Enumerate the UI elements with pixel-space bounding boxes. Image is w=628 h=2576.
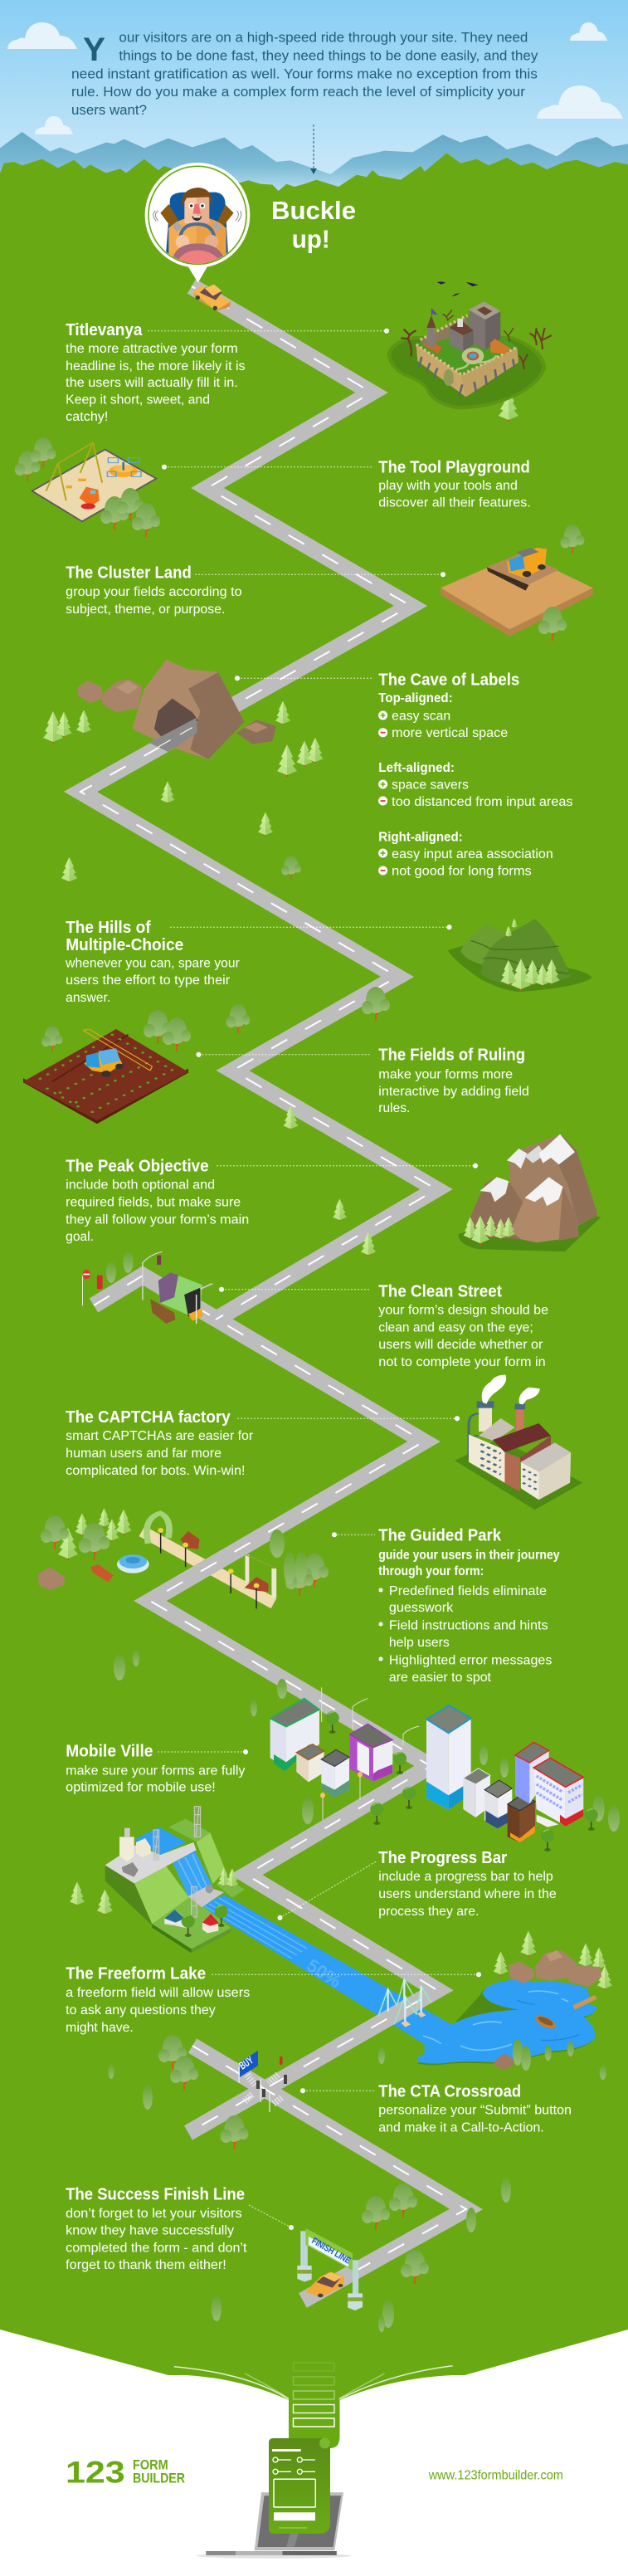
illustration: wheat field with combine — [441, 548, 593, 637]
text block: The Clean Street — [378, 1282, 548, 1369]
dashed arrow from intro to driver — [310, 124, 317, 174]
text block: The Tool Playground: The Tool Playground — [378, 457, 530, 476]
lamp posts — [320, 1772, 363, 1820]
illustration: clean street garbage truck — [82, 1251, 212, 1324]
text block: The Hills of Multiple-Choice: answer. — [66, 991, 110, 1005]
text block: The Cave of Labels: easy scan — [392, 709, 450, 723]
intro paragraph: need instant gratification as well. Your forms make no exception from this — [71, 66, 538, 81]
text block: The Peak Objective: required fields, but make sure — [66, 1195, 241, 1209]
logo: 123 Form Builder: 123 — [66, 2456, 125, 2490]
text block: Titlevanya: Titlevanya — [66, 320, 143, 339]
text block: The Cluster Land: subject, theme, or purpose. — [66, 603, 225, 617]
logo: 123 Form Builder: FORM — [133, 2456, 168, 2472]
text block: The Tool Playground: play with your tools and — [378, 479, 518, 493]
text block: The Guided Park: Predefined fields eliminate — [389, 1584, 547, 1598]
text block: The Hills of Multiple-Choice: Multiple-Choice — [66, 935, 183, 954]
text block: The Peak Objective: The Peak Objective — [66, 1157, 209, 1176]
river from dam to lake — [201, 1895, 452, 2044]
sky background — [0, 0, 628, 191]
text block: The Clean Street: The Clean Street — [378, 1282, 502, 1301]
text block: Titlevanya: catchy! — [66, 410, 108, 424]
text block: The Cave of Labels: easy input area association — [392, 847, 553, 861]
shore rock — [494, 2053, 514, 2070]
text block: The Cave of Labels: space savers — [392, 778, 469, 793]
illustration: the peak objective mountains — [459, 1134, 601, 1251]
intro paragraph: Y — [83, 32, 105, 68]
text block: The Success Finish Line — [66, 2185, 247, 2272]
illustration: hills of multiple choice — [448, 919, 592, 992]
text block: Mobile Ville: optimized for mobile use! — [66, 1781, 216, 1795]
text block: Mobile Ville: make sure your forms are fully — [66, 1764, 246, 1778]
text block: The CTA Crossroad: The CTA Crossroad — [378, 2082, 521, 2101]
text block: The CAPTCHA factory — [66, 1408, 253, 1478]
illustration: cave of labels — [77, 660, 276, 759]
text block: Titlevanya: the users will actually fill it in. — [66, 376, 238, 390]
text block: The Tool Playground — [378, 457, 531, 510]
text block: The Clean Street: users will decide whether or — [378, 1338, 543, 1352]
text block: The Fields of Ruling: rules. — [378, 1101, 410, 1115]
text block: The Cave of Labels: Top-aligned: — [378, 691, 453, 705]
logo: 123 Form Builder — [66, 2456, 185, 2490]
text block: The Freeform Lake — [66, 1964, 251, 2035]
crossroad zebra crossings — [245, 2075, 282, 2104]
text block: The Guided Park: guide your users in their journey — [378, 1548, 560, 1562]
text block: The Cave of Labels: Left-aligned: — [378, 761, 455, 775]
form sheet — [269, 2438, 330, 2534]
text block: The Guided Park: guesswork — [389, 1601, 453, 1615]
text block: The Hills of Multiple-Choice: users the effort to type their — [66, 973, 230, 988]
text block: The Freeform Lake: The Freeform Lake — [66, 1964, 206, 1983]
finish line banner text: FINISH LINE — [310, 2236, 353, 2266]
text block: The Freeform Lake: might have. — [66, 2021, 134, 2035]
text block: The Fields of Ruling: make your forms more — [378, 1067, 513, 1081]
text block: The Guided Park: through your form: — [378, 1564, 484, 1578]
clouds — [7, 22, 623, 134]
text block: The Guided Park: The Guided Park — [378, 1526, 502, 1545]
text block: The Progress Bar: process they are. — [378, 1905, 480, 1919]
illustration: finish line gate and car — [297, 2228, 363, 2310]
text block: The Peak Objective — [66, 1157, 249, 1244]
text block: The Guided Park: are easier to spot — [389, 1671, 492, 1685]
rocks above lake — [509, 1950, 601, 1987]
peak pines — [464, 1215, 515, 1245]
text block: The Hills of Multiple-Choice — [65, 918, 240, 1005]
heading: Buckle up: Buckle — [271, 196, 356, 225]
text block: The Progress Bar: The Progress Bar — [378, 1848, 507, 1867]
tall blue tower — [426, 1705, 471, 1810]
icon: taxi car — [193, 285, 231, 310]
text block: The Cave of Labels — [378, 671, 573, 878]
hills pines — [500, 919, 560, 991]
text block: The Peak Objective: include both optional and — [66, 1178, 215, 1192]
text block: The Freeform Lake: to ask any questions they — [66, 2003, 216, 2017]
purple building — [350, 1724, 392, 1782]
text block: The CTA Crossroad: and make it a Call-to-Action. — [378, 2121, 544, 2135]
river from dam to lake: 50% — [303, 1954, 345, 1992]
intro paragraph: things to be done fast, they need things to be done easily, and they — [119, 48, 538, 64]
website url: www.123formbuilder.com — [428, 2469, 563, 2483]
pine trees — [43, 389, 612, 1990]
text block: The Fields of Ruling — [378, 1046, 529, 1115]
park trees — [41, 1508, 329, 1596]
text block: The Cluster Land: group your fields according to — [66, 585, 242, 599]
illustration: freeform lake bridge, rocks and boat — [378, 1950, 601, 2070]
park path — [142, 1531, 274, 1603]
text block: The Guided Park: help users — [389, 1636, 450, 1650]
text block: The Hills of Multiple-Choice: The Hills of — [66, 918, 151, 937]
heading: Buckle up: up! — [292, 224, 330, 253]
street trees — [326, 1711, 598, 1852]
funnel sweep lines — [174, 2366, 453, 2399]
text block: The Cave of Labels: too distanced from input areas — [392, 795, 573, 809]
text block: The Clean Street: clean and easy on the eye; — [378, 1320, 533, 1334]
text block: The Tool Playground: discover all their features. — [378, 496, 531, 510]
text block: The CAPTCHA factory: The CAPTCHA factory — [66, 1408, 231, 1427]
row of townhouses — [463, 1769, 535, 1842]
intro paragraph: users want? — [71, 102, 147, 118]
text block: Mobile Ville — [66, 1742, 246, 1795]
illustration: Titlevanya castle — [387, 281, 552, 409]
text block: The Fields of Ruling: The Fields of Ruling — [378, 1046, 525, 1065]
text block: The Cave of Labels: not good for long forms — [392, 864, 532, 878]
text block: The Cluster Land: The Cluster Land — [66, 564, 192, 583]
text block: The Hills of Multiple-Choice: whenever you can, spare your — [65, 956, 240, 970]
text block: The Progress Bar: users understand where in the — [378, 1887, 557, 1901]
illustration: progress bar dam and hills — [105, 1807, 245, 1953]
buy sign and traffic lights at CTA crossroad: BUY — [236, 2054, 256, 2072]
text block: The Fields of Ruling: interactive by adding field — [378, 1085, 529, 1099]
red office building — [515, 1742, 583, 1827]
leader lines — [148, 329, 481, 2230]
text block: The Freeform Lake: a freeform field will allow users — [66, 1986, 251, 2000]
text block: The Clean Street: your form’s design should be — [378, 1303, 548, 1317]
text block: The Cave of Labels: more vertical space — [392, 726, 508, 740]
illustration: playground — [32, 442, 156, 521]
text block: The Success Finish Line: completed the form - and don’t — [66, 2241, 247, 2255]
heading: Buckle up — [271, 196, 356, 253]
illustration: mobile ville city — [270, 1687, 583, 1842]
illustration: fields of ruling with tractor — [23, 1029, 188, 1124]
winding road — [80, 286, 466, 2300]
text block: The Progress Bar — [378, 1848, 557, 1919]
text block: The CTA Crossroad — [378, 2082, 572, 2135]
text block: The Success Finish Line: know they have successfully — [66, 2223, 234, 2237]
logo: 123 Form Builder: BUILDER — [133, 2471, 185, 2486]
green tower — [270, 1699, 319, 1771]
text block: The CAPTCHA factory: human users and far more — [66, 1447, 222, 1461]
rock cypress near lake — [513, 2039, 531, 2071]
cable stayed bridge — [378, 1979, 431, 2027]
text block: The Cave of Labels: Right-aligned: — [378, 830, 463, 844]
brown corner shop — [296, 1744, 324, 1782]
lake — [398, 1980, 597, 2065]
intro paragraph: rule. How do you make a complex form reach the level of simplicity your — [71, 84, 525, 100]
text block: The Peak Objective: goal. — [66, 1230, 94, 1244]
text block: The Guided Park: Highlighted error messages — [389, 1653, 553, 1667]
intro paragraph — [71, 30, 538, 118]
teal storefront building — [321, 1749, 349, 1798]
text block: The Cluster Land — [66, 564, 242, 617]
text block: The Progress Bar: include a progress bar to help — [378, 1870, 553, 1884]
text block: The Success Finish Line: The Success Finish Line — [66, 2185, 245, 2204]
text block: Titlevanya: headline is, the more likely it is — [66, 359, 246, 373]
text block: The Success Finish Line: forget to thank them either! — [66, 2258, 226, 2272]
cypress trees — [106, 1251, 620, 2332]
text block: The CAPTCHA factory: smart CAPTCHAs are easier for — [66, 1429, 253, 1443]
text block: The Clean Street: not to complete your form in — [378, 1355, 546, 1369]
illustration: guided park — [38, 1513, 276, 1608]
text block: The Success Finish Line: don’t forget to let your visitors — [66, 2207, 242, 2221]
dam trees — [182, 1867, 238, 1937]
text block: The Cave of Labels: The Cave of Labels — [378, 671, 519, 690]
text block: The Peak Objective: they all follow your form’s main — [66, 1212, 249, 1227]
illustration: captcha factory — [455, 1375, 583, 1510]
text block: Titlevanya — [66, 320, 246, 424]
distant blue mountains — [0, 132, 628, 199]
rowing boat — [533, 2013, 557, 2031]
text block: The CAPTCHA factory: complicated for bots. Win-win! — [66, 1464, 246, 1478]
buy sign and traffic lights at CTA crossroad — [236, 2051, 287, 2112]
intro paragraph: our visitors are on a high-speed ride through your site. They need — [119, 30, 528, 46]
text block: The CTA Crossroad: personalize your “Submit” button — [378, 2104, 572, 2118]
text block: Titlevanya: the more attractive your form — [66, 342, 238, 356]
form fields scroll — [294, 2363, 334, 2427]
icon: driver speech bubble — [145, 163, 250, 283]
round trees — [15, 437, 584, 2284]
text block: Titlevanya: Keep it short, sweet, and — [66, 393, 210, 407]
wooden dock — [572, 1995, 597, 2010]
laptop — [197, 2492, 351, 2559]
text block: Mobile Ville: Mobile Ville — [66, 1742, 153, 1761]
text block: The Guided Park: Field instructions and hints — [389, 1618, 548, 1632]
text block: The Guided Park — [378, 1526, 560, 1685]
